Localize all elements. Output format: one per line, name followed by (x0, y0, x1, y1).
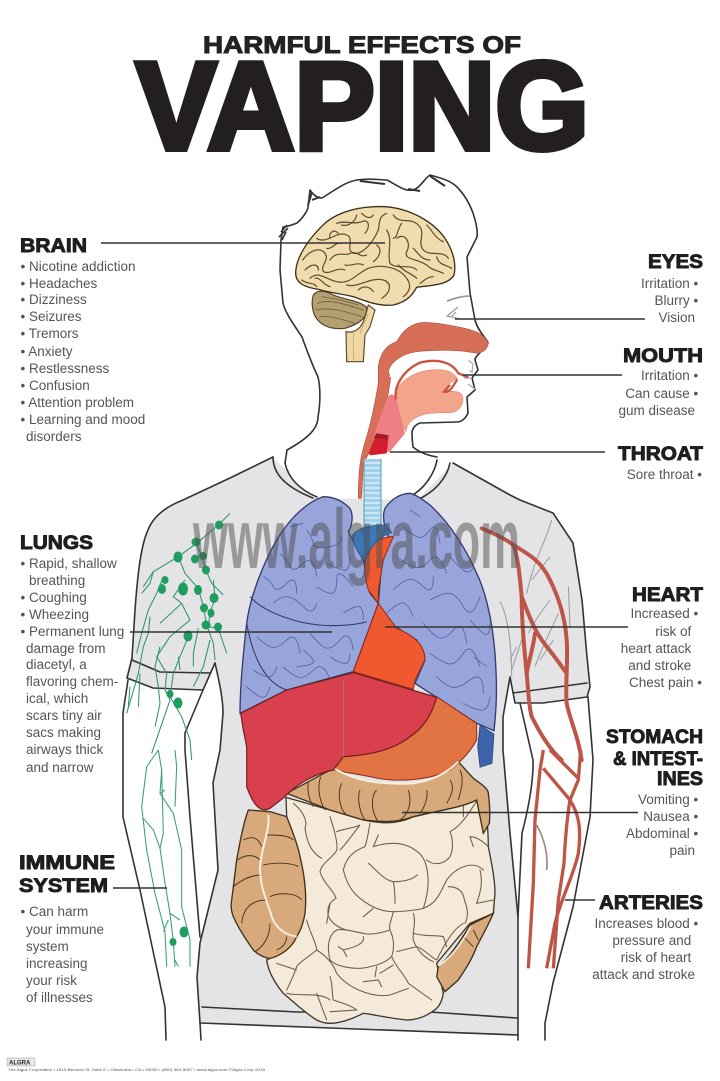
immune system effects: • Can harm (20, 904, 88, 919)
stomach and intestines effects: pain (669, 843, 695, 858)
lungs effects: • Permanent lung (20, 624, 124, 639)
brain effects: • Seizures (20, 309, 82, 324)
lungs effects: ical, which (26, 691, 88, 706)
arteries effects: pressure and (612, 933, 691, 948)
head outline (279, 175, 488, 463)
arteries heading: ARTERIES (599, 892, 703, 914)
mouth effects: Can cause • (625, 386, 698, 401)
lung veins (247, 510, 490, 710)
lungs effects: flavoring chem- (26, 674, 118, 689)
brain effects: • Tremors (20, 326, 79, 341)
lung fissures (247, 597, 367, 690)
lungs effects: damage from (26, 641, 106, 656)
brain effects: • Dizziness (20, 292, 87, 307)
arteries effects: risk of heart (621, 950, 691, 965)
lungs effects: • Coughing (20, 590, 87, 605)
immune system heading: SYSTEM (19, 875, 108, 897)
t-shirt torso (127, 457, 590, 1040)
panel: eyes (641, 251, 703, 325)
brain stem (346, 305, 375, 362)
stomach and intestines heading: STOMACH (606, 726, 703, 748)
lungs effects: scars tiny air (26, 708, 102, 723)
pulmonary vessel (353, 525, 392, 562)
leader lines (101, 243, 645, 900)
brain effects: disorders (26, 429, 82, 444)
heart effects: risk of (655, 624, 691, 639)
cerebellum (312, 291, 367, 329)
throat effects: Sore throat • (627, 467, 702, 482)
panel: arteries (592, 892, 703, 982)
brain effects: • Attention problem (20, 395, 134, 410)
mouth, nose and throat (358, 322, 488, 498)
heart effects: and stroke (628, 658, 691, 673)
mouth effects: gum disease (618, 403, 695, 418)
throat heading: THROAT (618, 443, 703, 465)
heart effects: Increased • (630, 606, 699, 621)
panel: heart (621, 584, 703, 690)
stomach and intestines heading: & INTEST- (613, 748, 703, 770)
stomach and intestines effects: Abdominal • (626, 826, 698, 841)
lungs heading: LUNGS (20, 532, 93, 554)
brain effects: • Nicotine addiction (20, 259, 136, 274)
publisher logo: ALGRA (9, 1060, 31, 1066)
immune system heading (19, 852, 115, 897)
lungs effects: • Wheezing (20, 607, 89, 622)
footer credit (7, 1058, 265, 1072)
eyes effects: Irritation • (641, 276, 699, 291)
stomach and intestines effects: Vomiting • (638, 792, 698, 807)
heart (353, 525, 425, 689)
brain effects: • Anxiety (20, 344, 73, 359)
lymph nodes (158, 520, 223, 946)
immune system effects: system (26, 939, 69, 954)
brain effects: • Learning and mood (20, 412, 145, 427)
stomach lower band (334, 762, 458, 784)
immune system effects: increasing (26, 956, 88, 971)
immune system heading: IMMUNE (19, 852, 115, 874)
spleen (478, 725, 494, 767)
eyes effects: Vision (658, 310, 695, 325)
panel: throat (618, 443, 703, 482)
lungs effects: and narrow (26, 760, 94, 775)
trachea (364, 459, 381, 527)
mouth heading: MOUTH (623, 345, 703, 367)
panel: immune system (19, 852, 115, 1005)
colon (231, 762, 493, 992)
publisher logo (7, 1058, 35, 1066)
lungs effects: • Rapid, shallow (20, 556, 117, 571)
lymphatic system on arm (127, 513, 230, 967)
lungs effects: breathing (29, 573, 85, 588)
arms (123, 680, 593, 1040)
lungs effects: diacetyl, a (26, 657, 87, 672)
title: VAPING (136, 38, 589, 176)
right lung (378, 493, 496, 731)
heart effects: heart attack (621, 641, 691, 656)
small intestine (267, 782, 495, 1023)
lungs effects: sacs making (26, 725, 101, 740)
stomach and intestines effects: Nausea • (643, 809, 699, 824)
heart effects: Chest pain • (629, 675, 702, 690)
immune system effects: of illnesses (26, 990, 93, 1005)
brain effects: • Headaches (20, 276, 98, 291)
lungs effects: airways thick (26, 742, 104, 757)
liver (241, 673, 437, 810)
cerebrum (296, 207, 455, 305)
heart heading: HEART (632, 584, 703, 606)
mouth effects: Irritation • (641, 368, 699, 383)
stomach (333, 697, 477, 780)
panel: mouth (618, 345, 703, 418)
eyes heading: EYES (648, 251, 703, 273)
eyes effects: Blurry • (654, 293, 699, 308)
brain heading: BRAIN (20, 235, 87, 257)
title: HARMFUL EFFECTS OF (203, 32, 521, 59)
immune system effects: your risk (26, 973, 77, 988)
brain effects: • Confusion (20, 378, 90, 393)
publisher address: The Algra Corporation • 1810 Bernard St, Suite E • Oklahoma • CA • 93000 • (800) 384-5657 • www.algra.com ©Algra Corp 2018 (8, 1068, 265, 1072)
panel: brain (20, 235, 149, 444)
arteries effects: attack and stroke (592, 967, 695, 982)
arteries on arm (482, 520, 582, 968)
brain effects: • Restlessness (20, 361, 110, 376)
immune system effects: your immune (26, 922, 104, 937)
lungs (240, 493, 496, 731)
left lung (240, 497, 378, 713)
panel: stomach and intestines (606, 726, 703, 858)
neck and collar (273, 420, 450, 500)
stomach and intestines heading: INES (657, 768, 703, 790)
stomach and intestines heading (606, 726, 703, 790)
brain (296, 207, 455, 362)
arteries effects: Increases blood • (594, 916, 698, 931)
panel: lungs (20, 532, 128, 775)
